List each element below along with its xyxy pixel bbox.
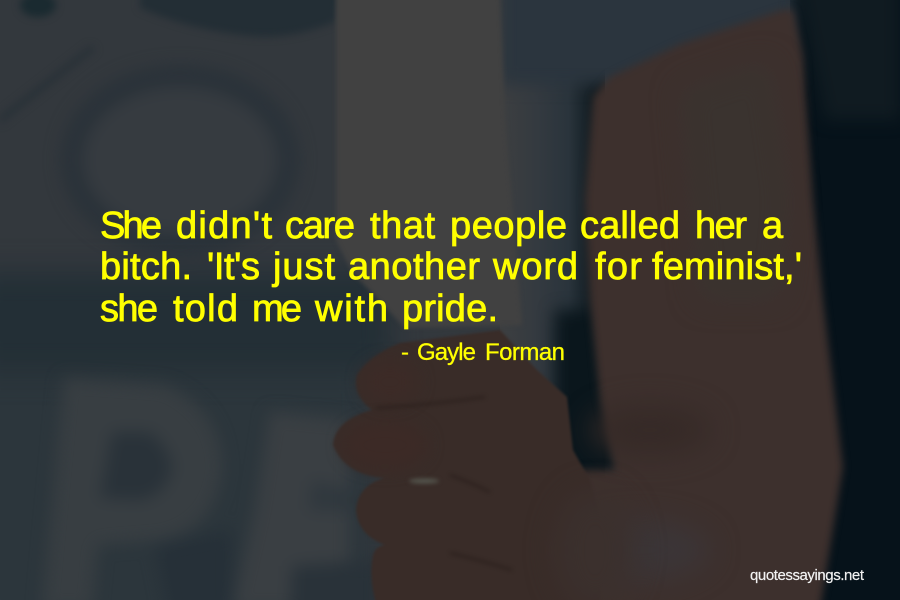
line 3: me xyxy=(252,288,302,330)
line 3: she xyxy=(100,288,158,330)
author attribution xyxy=(401,339,565,366)
watermark: quotessayings.net xyxy=(750,567,865,584)
fingernail xyxy=(409,478,439,484)
line 2: for xyxy=(595,246,642,288)
background letters P and R xyxy=(42,378,380,600)
arm xyxy=(560,10,843,600)
line 1: She xyxy=(100,205,162,247)
line 3: with xyxy=(314,288,388,330)
line 1: a xyxy=(762,205,784,247)
line 2: word xyxy=(492,246,578,288)
line 2: 'It's xyxy=(207,246,260,288)
line 3: pride. xyxy=(402,288,498,330)
blend into wrist xyxy=(555,490,635,600)
line 1: that xyxy=(370,205,435,247)
line 1: didn't xyxy=(176,205,272,247)
background letter O xyxy=(72,76,288,244)
line 2 xyxy=(100,246,802,288)
line 1 xyxy=(100,205,784,247)
line 2: feminist,' xyxy=(652,246,802,288)
author attribution: - xyxy=(401,339,409,366)
line 2: another xyxy=(348,246,480,288)
quote text xyxy=(100,205,802,330)
line 1: people xyxy=(450,205,567,247)
lower-left background xyxy=(0,272,390,600)
hand xyxy=(333,330,635,600)
top-left dark blotches xyxy=(0,0,340,125)
author attribution: Gayle xyxy=(417,339,476,366)
line 2: just xyxy=(272,246,335,288)
line 3 xyxy=(100,288,498,330)
author attribution: Forman xyxy=(485,339,565,366)
line 1: care xyxy=(285,205,355,247)
held card xyxy=(336,0,522,328)
far right dark background xyxy=(790,0,900,600)
line 2: bitch. xyxy=(100,246,192,288)
finger creases xyxy=(376,397,512,570)
line 3: told xyxy=(173,288,238,330)
teal gap beside the card xyxy=(500,0,605,480)
line 1: her xyxy=(695,205,747,247)
line 1: called xyxy=(580,205,680,247)
